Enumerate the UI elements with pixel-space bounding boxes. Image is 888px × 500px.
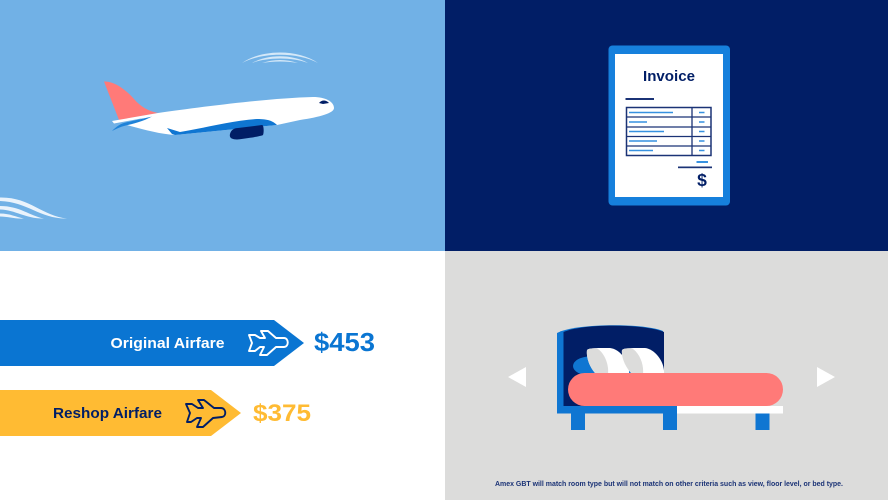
icon: bed — [557, 325, 783, 430]
panel: hotel room — [445, 251, 888, 500]
icon: right arrow — [817, 367, 835, 387]
icon: invoice document — [608, 46, 730, 206]
original price: $453 — [314, 327, 375, 357]
panel: airfare comparison — [0, 251, 445, 500]
panel: invoice background — [445, 0, 888, 251]
icon: airplane — [104, 81, 334, 140]
invoice heading: Invoice — [643, 69, 695, 85]
icon: wind lines upper — [242, 52, 318, 63]
pillows — [587, 348, 664, 374]
invoice total symbol: $ — [697, 170, 707, 190]
icon: outline plane navy — [186, 400, 225, 427]
reshop price: $375 — [253, 400, 311, 427]
original airfare arrow: Original Airfare — [110, 335, 224, 352]
panel: airplane sky — [0, 0, 445, 251]
reshop airfare arrow — [0, 390, 241, 436]
reshop airfare arrow: Reshop Airfare — [53, 405, 162, 422]
icon: wind lines lower — [0, 197, 67, 219]
original airfare arrow — [0, 320, 304, 366]
icon: left arrow — [508, 367, 526, 387]
icon: outline plane white — [249, 331, 288, 355]
disclaimer text: Amex GBT will match room type but will not match on other criteria such as view, floor level, or bed type. — [495, 481, 843, 488]
invoice table — [626, 107, 711, 156]
